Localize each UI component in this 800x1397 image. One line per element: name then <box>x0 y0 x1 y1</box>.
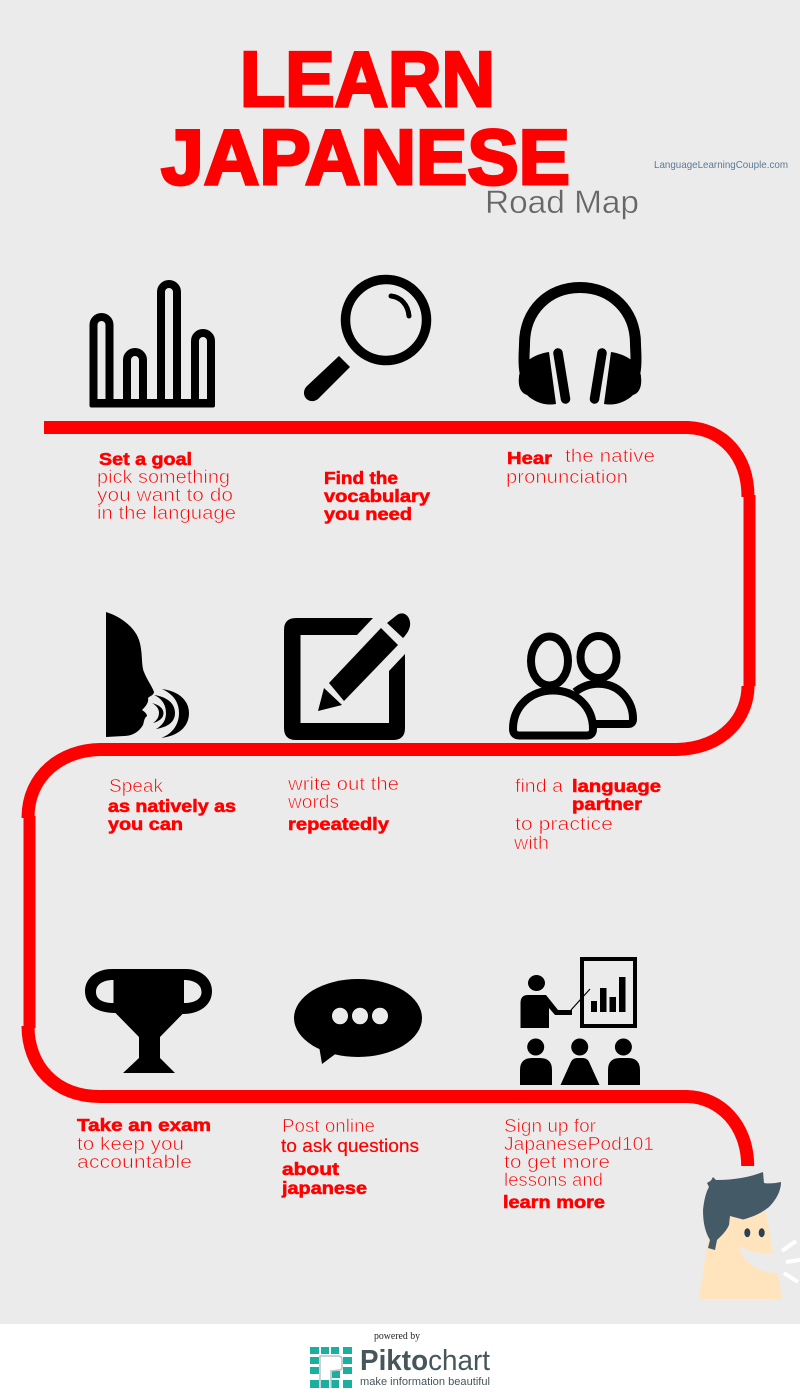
step 7 text: Take an exam <box>77 1115 211 1135</box>
step 8 text <box>281 1116 419 1198</box>
step 6 text: partner <box>572 794 642 814</box>
step 6 text: to practice <box>515 814 613 834</box>
step 7 text <box>77 1115 211 1172</box>
step 5 text: write out the <box>287 774 399 794</box>
icon: trophy <box>85 969 212 1073</box>
character: speaking man <box>699 1172 800 1299</box>
step 8 text: japanese <box>281 1178 367 1198</box>
step 1 text: in the language <box>97 503 236 523</box>
step 3 text: the native <box>565 446 655 466</box>
title <box>161 35 570 201</box>
step 1 text: you want to do <box>97 485 233 505</box>
step 3 text: Hear <box>507 448 552 468</box>
logo: piktochart mark <box>310 1347 352 1388</box>
step 2 text: vocabulary <box>324 486 430 506</box>
step 8 text: Post online <box>282 1116 375 1136</box>
step 1 text <box>97 449 236 523</box>
icon: headphones <box>519 288 641 405</box>
footer: powered by: powered by <box>374 1331 420 1342</box>
step 6 text: with <box>513 833 549 853</box>
step 5 text: repeatedly <box>288 814 389 834</box>
step 2 text: Find the <box>324 468 398 488</box>
step 2 text <box>324 468 430 524</box>
step 8 text: to ask questions <box>281 1136 419 1156</box>
step 1 text: pick something <box>97 467 230 487</box>
step 7 text: accountable <box>77 1152 192 1172</box>
logo: piktochart wordmark: make information beautiful <box>360 1376 490 1388</box>
step 4 text: Speak <box>109 776 164 796</box>
footer band <box>0 1324 800 1397</box>
icon: magnifying glass <box>304 280 426 401</box>
step 9 text: to get more <box>504 1152 610 1172</box>
step 1 text: Set a goal <box>99 449 192 469</box>
logo: piktochart wordmark: Piktochart <box>360 1345 490 1377</box>
title: LEARN <box>240 35 495 123</box>
step 7 text: to keep you <box>77 1134 184 1154</box>
step 4 text: you can <box>108 814 183 834</box>
step 3 text <box>506 446 655 487</box>
step 6 text: find a <box>515 776 564 796</box>
step 6 text <box>513 776 661 853</box>
step 9 text <box>503 1116 654 1212</box>
icon: speech bubble <box>294 979 422 1064</box>
icon: bar chart <box>90 284 215 408</box>
step 6 text: language <box>572 776 661 796</box>
step 5 text <box>287 774 399 834</box>
icon: two people <box>513 636 633 736</box>
step 9 text: learn more <box>503 1192 605 1212</box>
step 5 text: words <box>287 792 339 812</box>
icon: presentation <box>520 959 640 1085</box>
icon: speaking face <box>106 612 189 738</box>
step 9 text: JapanesePod101 <box>504 1134 654 1154</box>
step 9 text: lessons and <box>504 1170 603 1190</box>
step 4 text: as natively as <box>108 796 236 816</box>
step 2 text: you need <box>324 504 412 524</box>
subtitle: road map: Road Map <box>485 184 639 220</box>
website credit: LanguageLearningCouple.com <box>654 159 788 171</box>
title: JAPANESE <box>161 113 570 201</box>
step 4 text <box>108 776 236 834</box>
road path <box>28 428 750 1166</box>
icon: note and pencil <box>284 613 410 740</box>
step 9 text: Sign up for <box>504 1116 596 1136</box>
step 8 text: about <box>282 1159 339 1179</box>
step 3 text: pronunciation <box>506 467 628 487</box>
